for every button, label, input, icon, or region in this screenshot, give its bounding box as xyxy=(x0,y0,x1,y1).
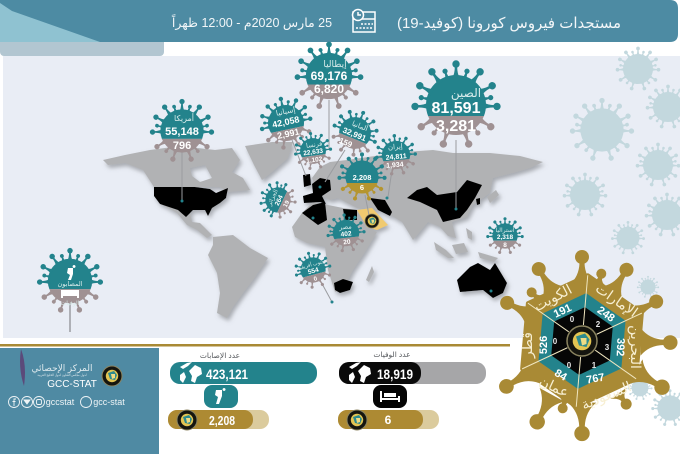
country name: Oman: عمان xyxy=(537,373,572,400)
number: South Africa cases: 554 xyxy=(307,267,320,276)
icon: GCC logo xyxy=(102,366,122,386)
label: Egypt: مصر xyxy=(338,223,352,232)
number: Oman cases: 84 xyxy=(552,367,570,384)
GCC cases bar xyxy=(168,410,269,429)
number: Australia deaths: 8 xyxy=(503,242,507,249)
map: egypt highlighted xyxy=(343,209,357,220)
pointer lines xyxy=(180,100,492,304)
virus: Australia xyxy=(486,217,524,254)
virus: Iran xyxy=(373,132,419,177)
footer panel: GCC-STAT xyxy=(0,348,159,454)
number: China deaths: 3,281 xyxy=(436,118,476,135)
world map xyxy=(103,142,543,318)
icon: globe xyxy=(180,362,202,383)
icon: centre GCC logo xyxy=(567,326,597,356)
map: western europe highlighted xyxy=(303,174,331,204)
number: France deaths: 1,102 xyxy=(306,156,323,165)
map: saudi arabia highlighted xyxy=(357,208,388,230)
virus: France xyxy=(291,129,335,172)
country name: Kuwait: الكويت xyxy=(531,281,575,315)
number: Saudi cases: 767 xyxy=(585,372,606,387)
number: Australia cases: 2,318 xyxy=(497,234,514,241)
number: Italy deaths: 6,820 xyxy=(314,82,344,96)
icon: person box xyxy=(204,385,238,408)
icon: bed box xyxy=(373,385,407,408)
country name: Saudi Arabia: السعودية xyxy=(579,378,634,414)
virus: Spain xyxy=(254,91,318,154)
number: USA deaths: 796 xyxy=(173,140,191,152)
label: Italy: إيطاليا xyxy=(323,59,347,70)
number: Germany cases: 32,991 xyxy=(341,126,368,143)
virus: South Africa xyxy=(290,247,336,293)
panel: total cases xyxy=(168,351,317,430)
map: africa xyxy=(292,202,377,292)
map: south africa highlighted xyxy=(334,279,353,293)
number: GCC cases: 2,208 xyxy=(209,414,235,428)
number: GCC deaths: 6 xyxy=(385,413,392,427)
heading: cases: عدد الإصابات xyxy=(200,351,240,360)
GCC-STAT wordmark: GCC-STAT xyxy=(47,379,97,390)
number: world cases: 423,121 xyxy=(206,366,248,382)
number: Iran cases: 24,811 xyxy=(385,153,407,162)
number: Germany deaths: 159 xyxy=(338,136,354,150)
map: greenland xyxy=(245,142,293,180)
map: indonesia xyxy=(434,228,498,262)
map: iran highlighted xyxy=(370,198,392,216)
label: infected: المصابون xyxy=(57,281,83,288)
map: madagascar xyxy=(366,266,374,282)
world deaths bar xyxy=(339,362,486,384)
handle: gcc-stat: gcc-stat xyxy=(93,397,125,407)
number: Spain cases: 42,058 xyxy=(271,114,300,130)
label: China: الصين xyxy=(451,86,481,101)
world cases bar xyxy=(170,362,317,384)
country name: Qatar: قطر xyxy=(519,332,536,359)
virus: Egypt xyxy=(324,211,368,254)
icon: calendar xyxy=(352,10,375,32)
number: world deaths: 18,919 xyxy=(377,366,413,382)
logo swoosh xyxy=(20,349,25,386)
map: australia highlighted xyxy=(457,263,507,298)
map: korea highlighted xyxy=(476,198,480,205)
decorative virus field xyxy=(563,47,680,426)
icon: GCC logo xyxy=(177,410,197,430)
number: GCC cases: 2,208 xyxy=(353,173,371,182)
label: Algeria: الجزائر xyxy=(266,188,280,208)
header title: مستجدات فيروس كورونا (كوفيد-19) xyxy=(397,15,621,32)
country name: UAE: الإمارات xyxy=(592,280,641,321)
gold spikes xyxy=(493,250,678,441)
number: Italy cases: 69,176 xyxy=(311,69,348,83)
social icons xyxy=(8,396,92,408)
label: USA: أمريكا xyxy=(174,113,194,123)
death count: Saudi: 1 xyxy=(592,361,597,370)
map: japan xyxy=(487,190,499,203)
virus: USA xyxy=(150,99,214,162)
country name: Bahrain: البحرين xyxy=(627,325,644,369)
number: USA cases: 55,148 xyxy=(165,126,199,138)
label: South Africa: جنوب أفريقيا xyxy=(298,258,325,272)
death count: Qatar: 0 xyxy=(553,337,558,346)
handle: gccstat: gccstat xyxy=(46,397,75,407)
number: Bahrain cases: 392 xyxy=(614,338,626,356)
death count: Bahrain: 3 xyxy=(605,343,610,352)
icon: globe xyxy=(349,362,371,383)
map: central america xyxy=(158,202,212,238)
number: Algeria cases: 264 xyxy=(274,194,285,207)
icon: infected person xyxy=(67,265,76,280)
number: GCC deaths: 6 xyxy=(360,183,364,192)
number: South Africa deaths: 0 xyxy=(313,276,319,283)
page background xyxy=(3,56,680,338)
hexagon rings xyxy=(519,270,645,412)
virus: Algeria xyxy=(253,175,303,225)
GCC hexagon virus xyxy=(493,250,678,441)
organisation subtitle: لدول مجلس التعاون لدول الخليج العربية xyxy=(37,373,87,377)
map: china highlighted xyxy=(407,180,482,222)
heading: deaths: عدد الوفيات xyxy=(373,350,411,359)
number: UAE cases: 248 xyxy=(595,304,617,325)
gold divider line xyxy=(0,344,510,346)
death count: UAE: 2 xyxy=(596,320,601,329)
death count: Oman: 0 xyxy=(567,361,572,370)
number: China cases: 81,591 xyxy=(432,100,481,117)
icon: GCC logo xyxy=(347,410,367,430)
number: Iran deaths: 1,934 xyxy=(386,161,404,170)
number: Qatar cases: 526 xyxy=(538,336,550,354)
virus: China xyxy=(411,60,501,149)
number: Egypt cases: 402 xyxy=(340,230,352,239)
legend virus xyxy=(37,248,103,332)
death count: Kuwait: 0 xyxy=(570,315,575,324)
map: eurasia xyxy=(312,150,543,240)
map: algeria highlighted xyxy=(302,202,327,225)
GCC deaths bar xyxy=(338,410,439,429)
map: usa highlighted xyxy=(154,187,228,217)
number: Spain deaths: 2,991 xyxy=(276,127,300,141)
label: Germany: ألمانيا xyxy=(351,119,369,133)
virus: Germany xyxy=(324,102,386,163)
number: Egypt deaths: 20 xyxy=(343,239,351,246)
virus: GCC xyxy=(337,152,387,201)
label: Iran: إيران xyxy=(388,143,403,152)
label: Australia: أستراليا xyxy=(496,226,515,234)
label: Spain: إسبانيا xyxy=(275,105,296,118)
label: France: فرنسا xyxy=(306,141,323,150)
header band xyxy=(0,0,678,56)
number: Kuwait cases: 191 xyxy=(552,302,574,321)
map: south america xyxy=(208,235,268,318)
header date: 25 مارس 2020م - 12:00 ظهراً xyxy=(172,13,332,31)
number: Algeria deaths: 19 xyxy=(283,199,291,209)
map: north america xyxy=(103,146,250,192)
icon: GCC logo on map xyxy=(365,214,379,228)
virus: Italy xyxy=(295,42,363,110)
number: France cases: 22,633 xyxy=(303,148,324,157)
label: deaths: الوفيات xyxy=(61,300,80,307)
icon: bed xyxy=(61,290,79,298)
organisation name: المركز الإحصائي xyxy=(32,363,92,374)
panel: total deaths xyxy=(338,350,486,430)
bottom area white xyxy=(0,338,500,454)
